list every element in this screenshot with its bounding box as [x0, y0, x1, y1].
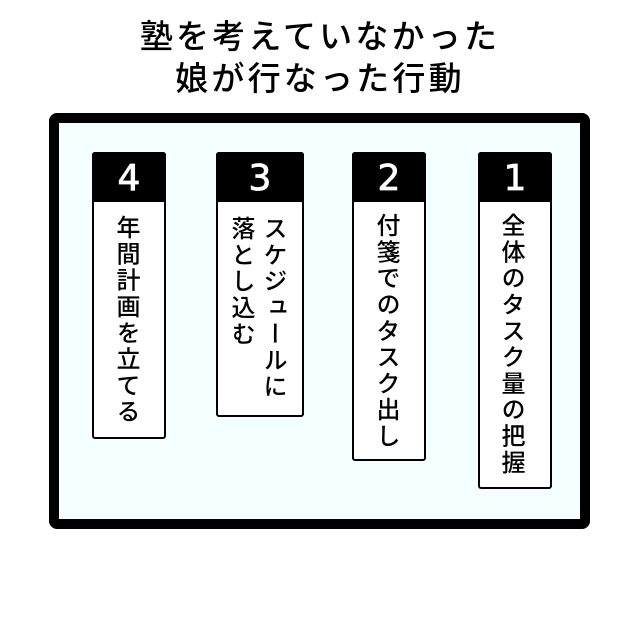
number 1: 1: [504, 158, 526, 199]
number 2: 2: [378, 158, 400, 199]
card: step 4: [92, 152, 166, 439]
text: step 4: 年間計画を立てる: [111, 215, 146, 425]
number 4: [92, 152, 166, 202]
number 1: [478, 152, 552, 202]
text: step 2: 付箋でのタスク出し: [371, 213, 406, 450]
number 2: [352, 152, 426, 202]
card: step 1: [478, 152, 552, 489]
title: 娘が行なった行動: [175, 52, 465, 100]
number 3: [216, 152, 304, 202]
card: step 2: [352, 152, 426, 461]
text: step 3: [226, 216, 293, 400]
panel: steps frame: [49, 113, 590, 529]
number 3: 3: [249, 158, 271, 199]
text: step 3: 落とし込む: [226, 216, 261, 348]
card: step 3: [216, 152, 304, 417]
text: step 3: スケジュールに: [258, 216, 293, 400]
number 4: 4: [118, 158, 140, 199]
title: [140, 10, 500, 100]
title: 塾を考えていなかった: [140, 10, 500, 58]
text: step 1: 全体のタスク量の把握: [496, 213, 531, 476]
